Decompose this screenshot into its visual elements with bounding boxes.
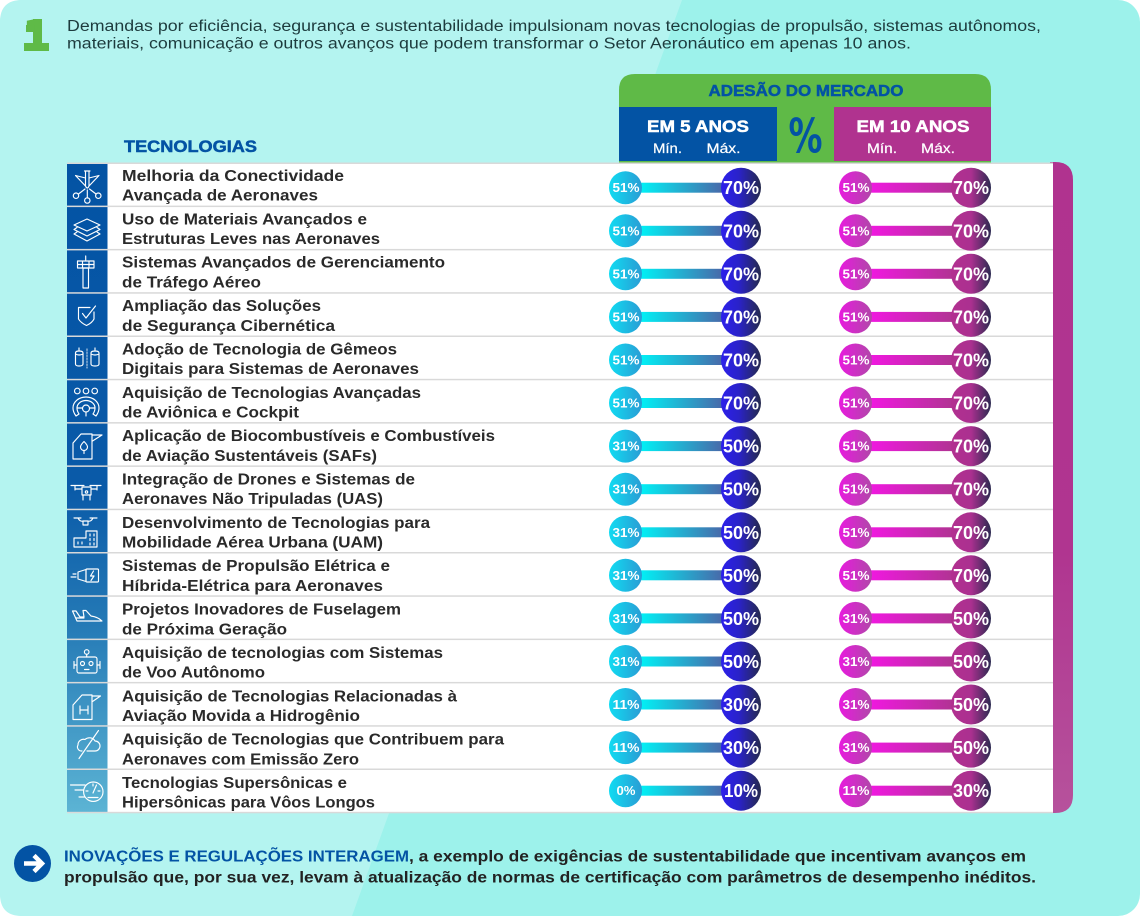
row 11 range 10 years [839,598,991,638]
icon: control tower [78,256,94,288]
callout text [64,848,1036,886]
row 2 range 10 years: 51% [842,223,870,238]
row 5 label: Digitais para Sistemas de Aeronaves [122,361,419,378]
row 14 range 10 years: 50% [953,738,989,758]
icon: material layers [74,219,100,241]
row 5 range 5 years: 51% [612,352,640,368]
row 10 range 10 years [839,555,991,595]
icon: cockpit avionics [73,388,99,416]
row 15 range 10 years: 11% [842,783,870,798]
row 12 label: Aquisição de tecnologias com Sistemas [122,645,443,662]
row 8 range 10 years [839,469,991,509]
row 3 range 5 years [609,254,761,294]
row 11 label: de Próxima Geração [122,621,287,638]
row 12 range 10 years [839,642,991,682]
row 10 label: Sistemas de Propulsão Elétrica e [122,558,390,575]
row 14 label [122,732,504,768]
row 9 range 10 years: 70% [953,523,989,543]
header: em 10 anos: Máx. [921,141,955,156]
row 8 range 5 years: 31% [612,482,640,497]
row 14 range 5 years [609,728,761,768]
callout text: propulsão que, por sua vez, levam à atualização de normas de certificação com parâmetros de desempenho inéditos. [64,869,1036,886]
row 6 label: de Aviônica e Cockpit [122,404,300,422]
icon: next generation fuselage [72,610,102,621]
header: em 5 anos: Máx. [706,141,740,156]
row 1 range 5 years: 51% [612,180,640,195]
icon: zero emission cloud [77,730,100,758]
row 2 range 5 years [609,211,761,251]
row 8 label: Integração de Drones e Sistemas de [122,472,415,488]
row 1 label [122,168,344,205]
row 6 range 10 years: 70% [953,394,989,414]
row 1 range 10 years: 51% [842,180,870,195]
row 6 range 10 years: 51% [842,396,870,410]
row 15 range 5 years: 10% [724,781,758,801]
section number: 1 [22,12,52,62]
row 11 range 10 years: 50% [953,609,989,629]
row 14 label: Aquisição de Tecnologias que Contribuem para [122,732,504,749]
purple side panel [1050,162,1073,813]
row 15 range 5 years: 0% [616,783,636,798]
icon: speedometer [70,782,103,801]
row 9 label [122,515,430,552]
row 7 label: Aplicação de Biocombustíveis e Combustíveis [122,428,495,445]
row 9 range 5 years: 50% [723,523,759,543]
row 5 label [122,341,419,378]
row 9 label: Mobilidade Aérea Urbana (UAM) [122,535,383,552]
row 8 range 10 years: 70% [953,480,989,500]
row 13 label: Aviação Movida a Hidrogênio [122,708,360,725]
row 14 label: Aeronaves com Emissão Zero [122,751,359,768]
row 11 range 10 years: 31% [842,611,870,626]
callout text: INOVAÇÕES E REGULAÇÕES INTERAGEM [64,848,409,866]
row 4 label: de Segurança Cibernética [122,318,335,335]
row 10 label [122,558,390,595]
row 3 range 10 years [839,254,991,294]
row 9 label: Desenvolvimento de Tecnologias para [122,515,430,532]
row 5 label: Adoção de Tecnologia de Gêmeos [122,341,397,358]
intro text [67,18,1041,52]
header: em 5 anos [619,107,777,161]
row 3 range 10 years: 70% [953,264,989,284]
row 11 range 5 years [609,598,761,638]
icon: biofuel can [73,434,102,459]
row 2 label [122,211,380,248]
row 9 range 5 years [609,512,761,552]
icon: security shield [78,306,96,326]
row 1 range 5 years [609,168,761,208]
icon: urban air mobility [74,518,97,547]
row 5 range 5 years: 70% [723,350,759,370]
row 1 range 10 years: 70% [953,178,989,198]
row 6 range 5 years: 51% [612,396,640,410]
row 8 label: Aeronaves Não Tripuladas (UAS) [122,491,383,508]
row 13 label: Aquisição de Tecnologias Relacionadas à [122,688,457,705]
row 12 range 5 years [609,642,761,682]
row 12 range 10 years: 31% [842,654,870,669]
row 3 range 5 years: 70% [723,264,759,284]
row 14 range 5 years: 11% [612,740,640,755]
row 15 range 5 years [609,771,761,811]
row 15 label: Hipersônicas para Vôos Longos [122,795,375,812]
header: em 10 anos [834,107,991,161]
row 14 range 10 years: 31% [842,740,870,755]
row 14 range 10 years [839,728,991,768]
row 9 range 10 years: 51% [842,525,870,540]
row 13 range 10 years [839,684,991,724]
row 8 range 5 years: 50% [723,480,759,500]
row 2 label: Uso de Materiais Avançados e [122,211,367,228]
row 13 range 10 years: 31% [842,697,870,712]
row 12 label: de Voo Autônomo [122,665,265,682]
row 7 range 5 years: 31% [612,439,640,454]
row 9 range 10 years [839,512,991,552]
row 3 label [122,255,445,291]
row 6 range 5 years [609,383,761,423]
row 9 range 5 years: 31% [612,525,640,540]
row 10 range 5 years: 31% [612,568,640,583]
icon: drone [71,486,101,500]
row 15 label [122,775,375,812]
row 4 range 5 years [609,297,761,337]
row 15 range 10 years: 30% [953,781,989,801]
icon: arrow callout [14,845,51,882]
row 1 range 5 years: 70% [723,178,759,198]
row 1 range 10 years [839,168,991,208]
row 2 label: Estruturas Leves nas Aeronaves [122,231,380,248]
row 12 label [122,645,443,682]
row 10 range 5 years [609,555,761,595]
header: adesão do mercado [619,74,991,164]
row 4 range 10 years: 51% [842,309,870,324]
row 7 label: de Aviação Sustentáveis (SAFs) [122,448,377,465]
row 14 range 5 years: 30% [723,738,759,758]
row 6 range 10 years [839,383,991,423]
row 7 range 10 years [839,426,991,466]
row 4 range 5 years: 51% [612,309,640,324]
row 3 label: Sistemas Avançados de Gerenciamento [122,255,445,272]
row 7 label [122,428,495,465]
row 10 label: Híbrida-Elétrica para Aeronaves [122,578,383,595]
icon: hydrogen can [73,695,100,720]
row 3 label: de Tráfego Aéreo [122,274,261,291]
row 11 range 5 years: 50% [723,609,759,629]
table background [67,163,1053,813]
row 5 range 5 years [609,340,761,380]
header: em 10 anos: EM 10 ANOS [856,117,970,136]
row 8 label [122,472,415,508]
row 15 range 10 years [839,771,991,811]
heading: tecnologias: TECNOLOGIAS [124,137,257,156]
row 6 range 5 years: 70% [723,394,759,414]
row 11 range 5 years: 31% [612,611,640,626]
row 4 range 10 years [839,297,991,337]
icon: electric propulsion [71,569,98,582]
row 4 range 5 years: 70% [723,307,759,327]
row 2 range 5 years: 70% [723,221,759,241]
row 1 label: Avançada de Aeronaves [122,188,318,205]
header: em 5 anos: EM 5 ANOS [647,117,749,136]
icon: autonomous robot [74,650,100,673]
row 13 label [122,688,457,725]
row 2 range 5 years: 51% [612,223,640,238]
row 7 range 10 years: 51% [842,439,870,454]
row 4 range 10 years: 70% [953,307,989,327]
row 13 range 5 years: 11% [612,697,640,712]
row 12 range 5 years: 50% [723,652,759,672]
row 8 range 5 years [609,469,761,509]
header title: ADESÃO DO MERCADO [708,80,904,100]
header: em 10 anos: Mín. [867,141,897,156]
row 2 range 10 years [839,211,991,251]
row 5 range 10 years: 51% [842,352,870,368]
row 2 range 10 years: 70% [953,221,989,241]
row 5 range 10 years: 70% [953,350,989,370]
intro text: Demandas por eficiência, segurança e sustentabilidade impulsionam novas tecnologias de propulsão, sistemas autônomos, [67,18,1041,35]
row 8 range 10 years: 51% [842,482,870,497]
row 7 range 5 years [609,426,761,466]
row 3 range 5 years: 51% [612,266,640,281]
row 11 label: Projetos Inovadores de Fuselagem [122,602,401,619]
row 15 label: Tecnologias Supersônicas e [122,775,347,792]
row 10 range 10 years: 70% [953,566,989,586]
header: em 5 anos: Mín. [653,141,682,156]
icon: connected aircraft [73,171,101,203]
row 13 range 10 years: 50% [953,695,989,715]
row 6 label: Aquisição de Tecnologias Avançadas [122,385,421,402]
callout text: , a exemplo de exigências de sustentabilidade que incentivam avanços em [409,849,1026,866]
row 4 label: Ampliação das Soluções [122,298,321,315]
row 10 range 5 years: 50% [723,566,759,586]
row 7 range 10 years: 70% [953,437,989,457]
row 13 range 5 years: 30% [723,695,759,715]
row 13 range 5 years [609,684,761,724]
icon: digital twins [76,348,99,368]
intro text: materiais, comunicação e outros avanços que podem transformar o Setor Aeronáutico em apenas 10 anos. [67,36,911,52]
row 10 range 10 years: 51% [842,568,870,583]
percent symbol: % [788,110,822,164]
row 6 label [122,385,421,422]
row 5 range 10 years [839,340,991,380]
row 12 range 10 years: 50% [953,652,989,672]
row 11 label [122,602,401,638]
row 1 label: Melhoria da Conectividade [122,168,344,185]
row 7 range 5 years: 50% [723,437,759,457]
row 4 label [122,298,335,335]
row 3 range 10 years: 51% [842,266,870,281]
row 12 range 5 years: 31% [612,654,640,669]
